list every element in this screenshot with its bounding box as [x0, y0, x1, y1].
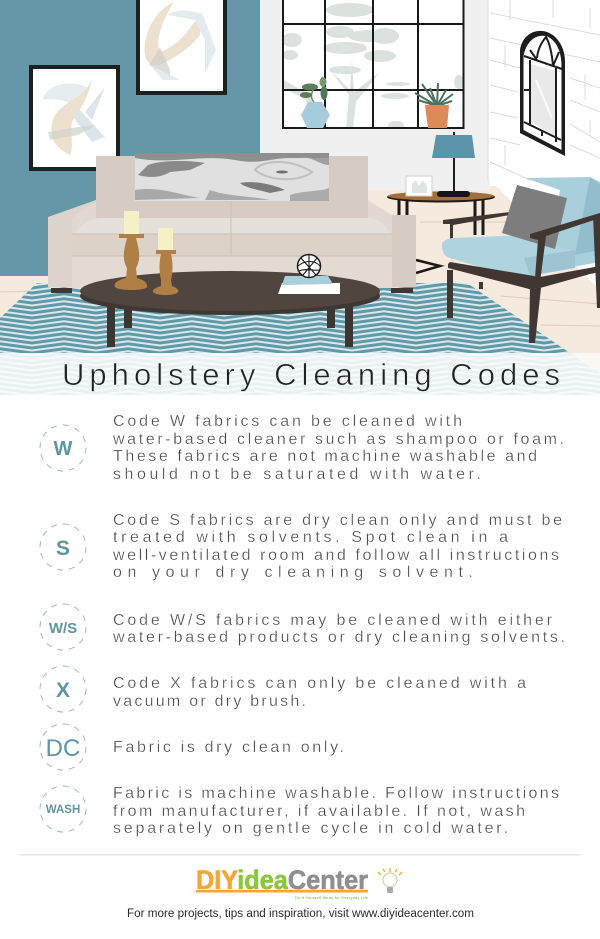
- code X: [40, 666, 526, 712]
- code WASH: Fabric is machine washable. Follow instructions: [113, 785, 559, 802]
- code W/S: [40, 604, 565, 650]
- rug: [0, 283, 570, 353]
- left arm: [48, 200, 96, 287]
- code X: X: [56, 679, 70, 702]
- arched mirror: [520, 31, 565, 156]
- brick wall: [488, 0, 600, 290]
- code S: S: [56, 537, 70, 560]
- sofa: [48, 156, 416, 293]
- sofa legs: [51, 288, 72, 293]
- code DC: Fabric is dry clean only.: [113, 739, 344, 756]
- code W: These fabrics are not machine washable and: [113, 448, 537, 465]
- code DC: [40, 724, 344, 770]
- code W/S: Code W/S fabrics may be cleaned with either: [113, 612, 553, 629]
- table lamp: [432, 132, 475, 197]
- code S: well-ventilated room and follow all instructions: [112, 547, 559, 564]
- code W: [40, 413, 564, 483]
- code S: treated with solvents. Spot clean in a: [113, 529, 508, 546]
- back frame arm: [443, 212, 510, 240]
- logo: DIYideaCenter: [196, 865, 368, 895]
- code WASH: from manufacturer, if available. If not, wash: [113, 803, 525, 820]
- chair cushion: [442, 235, 575, 283]
- code X: Code X fabrics can only be cleaned with a: [113, 675, 526, 692]
- plant: orange pot: [415, 83, 453, 128]
- coffee table: [80, 271, 380, 347]
- footer text: For more projects, tips and inspiration, visit www.diyideacenter.com: [127, 908, 474, 920]
- picture frame: [406, 176, 432, 196]
- code WASH: WASH: [46, 804, 80, 816]
- marble throw: [135, 153, 329, 201]
- code S: on your dry cleaning solvent.: [113, 564, 473, 581]
- right arm: [392, 215, 416, 287]
- code W: W: [54, 438, 73, 460]
- logo: Do it Yourself Ideas for Everyday Life: [295, 895, 369, 900]
- code W/S: water-based products or dry cleaning solvents.: [112, 629, 565, 646]
- framed art left: [29, 65, 120, 171]
- title: Upholstery Cleaning Codes: [62, 357, 560, 392]
- tree silhouette: [282, 3, 464, 129]
- code WASH: [40, 785, 559, 837]
- room background: [0, 0, 600, 356]
- code W/S: W/S: [49, 620, 77, 637]
- candle: large: [115, 211, 147, 290]
- code WASH: separately on gentle cycle in cold water.: [113, 820, 508, 837]
- framed art top: [136, 0, 227, 95]
- armchair: [442, 177, 600, 343]
- code X: vacuum or dry brush.: [113, 693, 306, 710]
- code W: Code W fabrics can be cleaned with: [113, 413, 462, 430]
- plant: blue pot: [300, 77, 330, 128]
- pillow: [502, 185, 567, 249]
- side table: [387, 192, 495, 273]
- candle: small: [153, 228, 178, 295]
- code W: should not be saturated with water.: [113, 466, 481, 483]
- books and sphere ornament: [278, 254, 340, 294]
- code W: water-based cleaner such as shampoo or foam.: [112, 431, 564, 448]
- code S: Code S fabrics are dry clean only and must be: [113, 512, 562, 529]
- code DC: DC: [46, 735, 80, 762]
- icon: light bulb: [378, 868, 402, 893]
- title band: [0, 353, 600, 395]
- code S: [40, 512, 562, 581]
- window: [282, 0, 464, 129]
- frame: [448, 262, 600, 290]
